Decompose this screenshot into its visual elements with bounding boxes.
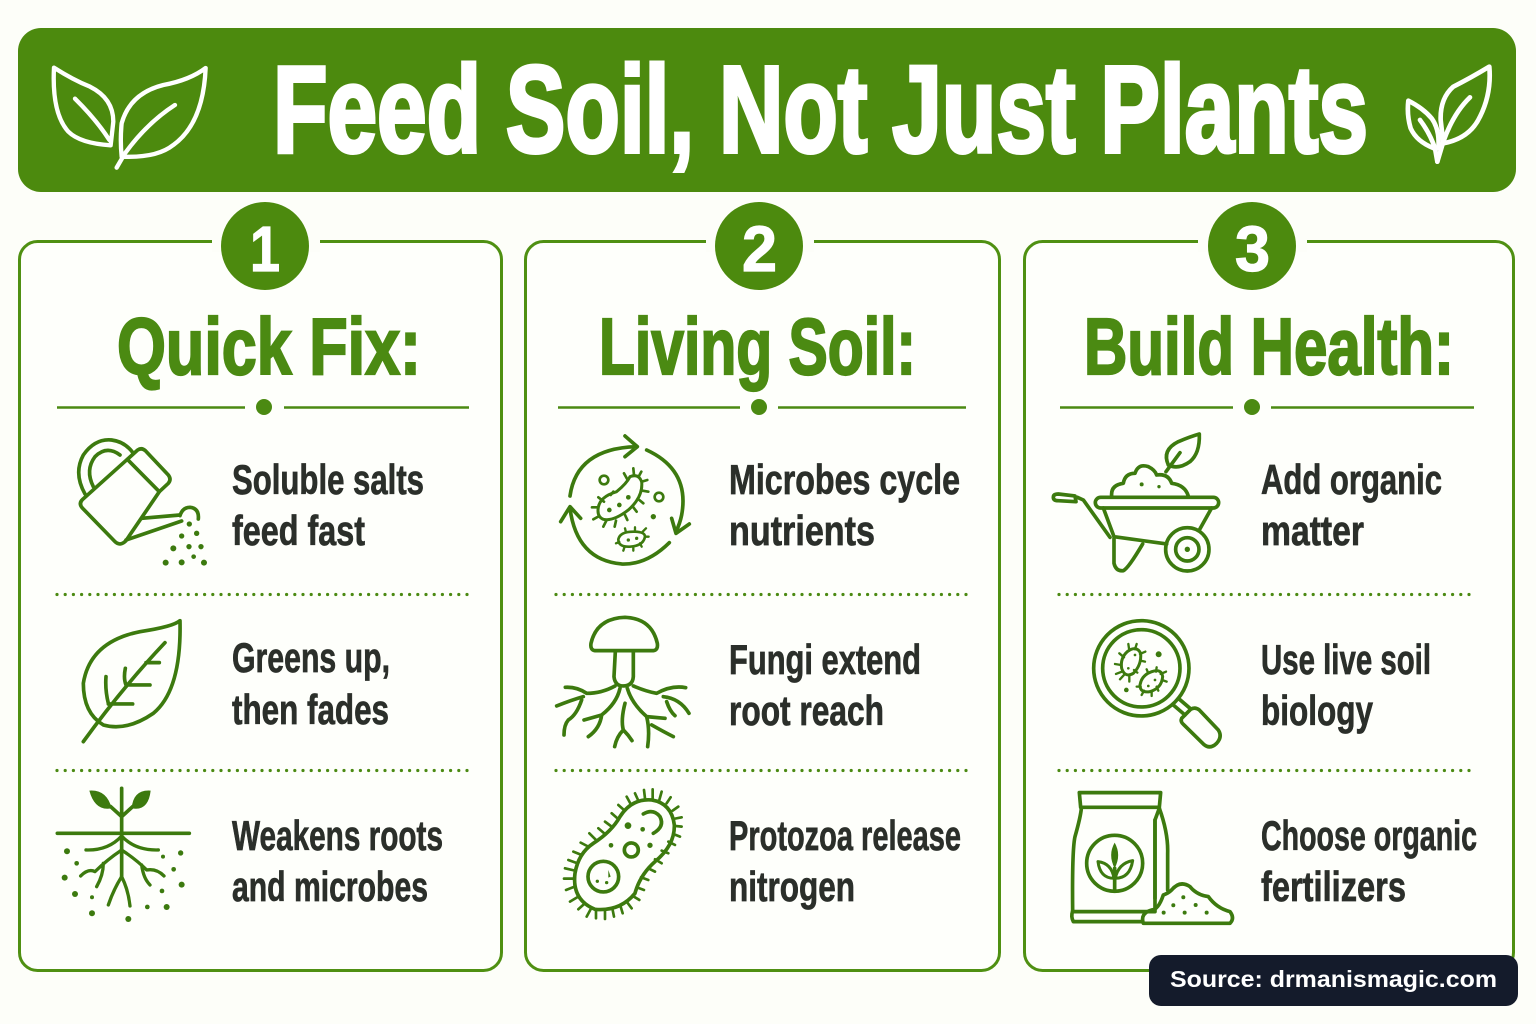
icon: microbes cycle <box>561 436 689 564</box>
text: Microbes cycle nutrients: nutrients <box>729 507 875 554</box>
text: Greens up, then fades: then fades <box>232 686 389 733</box>
text: Weakens roots and microbes: Weakens roots <box>232 812 443 859</box>
text: Fungi extend root reach: Fungi extend <box>729 636 921 683</box>
text: Weakens roots and microbes <box>232 812 443 910</box>
text: Greens up, then fades: Greens up, <box>232 634 390 681</box>
source badge: Source: drmanismagic.com <box>1170 966 1497 992</box>
text: Use live soil biology <box>1261 636 1431 734</box>
panel: Living Soil <box>526 202 1000 970</box>
icon: fungi with roots <box>557 617 689 747</box>
number badge 2: 2 <box>742 213 777 285</box>
number badge 1 <box>221 202 309 290</box>
panel: Build Health <box>1024 202 1514 970</box>
icon: left leaves <box>54 68 206 168</box>
text: Greens up, then fades <box>232 634 390 733</box>
text: Use live soil biology: Use live soil <box>1261 636 1431 683</box>
number badge 2 <box>715 202 803 290</box>
text: Microbes cycle nutrients <box>729 456 960 554</box>
text: Choose organic fertilizers <box>1261 812 1477 910</box>
number badge 3: 3 <box>1235 213 1270 285</box>
title banner <box>18 28 1516 192</box>
heading divider <box>558 399 966 415</box>
panel: Quick Fix <box>20 202 502 970</box>
text: Protozoa release nitrogen: nitrogen <box>729 863 855 910</box>
source badge <box>1149 955 1518 1006</box>
heading: Living Soil: Living Soil: <box>599 302 916 391</box>
text: Soluble salts feed fast: Soluble salts <box>232 456 424 503</box>
number badge 3 <box>1208 202 1296 290</box>
text: Protozoa release nitrogen: Protozoa release <box>729 812 961 859</box>
icon: watering can <box>79 440 207 566</box>
icon: right leaves <box>1408 67 1490 162</box>
text: Protozoa release nitrogen <box>729 812 961 910</box>
text: Microbes cycle nutrients: Microbes cycle <box>729 456 960 503</box>
icon: magnifier with microbes <box>1094 621 1220 747</box>
icon: wheelbarrow <box>1053 434 1219 571</box>
text: Fungi extend root reach <box>729 636 921 734</box>
text: Add organic matter: matter <box>1261 507 1364 554</box>
text: Soluble salts feed fast: feed fast <box>232 507 365 554</box>
heading divider <box>1060 399 1474 415</box>
icon: roots and microbes <box>57 788 189 922</box>
number badge 1: 1 <box>250 213 280 285</box>
text: Add organic matter: Add organic <box>1261 456 1442 503</box>
text: Add organic matter <box>1261 456 1442 554</box>
icon: fertilizer bag <box>1072 793 1232 923</box>
heading divider <box>57 399 469 415</box>
text: Use live soil biology: biology <box>1261 687 1373 734</box>
icon: protozoa <box>564 789 682 919</box>
text: Weakens roots and microbes: and microbes <box>232 863 428 910</box>
text: Choose organic fertilizers: fertilizers <box>1261 863 1406 910</box>
text: Soluble salts feed fast <box>232 456 424 554</box>
text: Fungi extend root reach: root reach <box>729 687 884 734</box>
icon: leaf <box>83 621 180 742</box>
heading: Quick Fix: Quick Fix: <box>117 302 421 391</box>
